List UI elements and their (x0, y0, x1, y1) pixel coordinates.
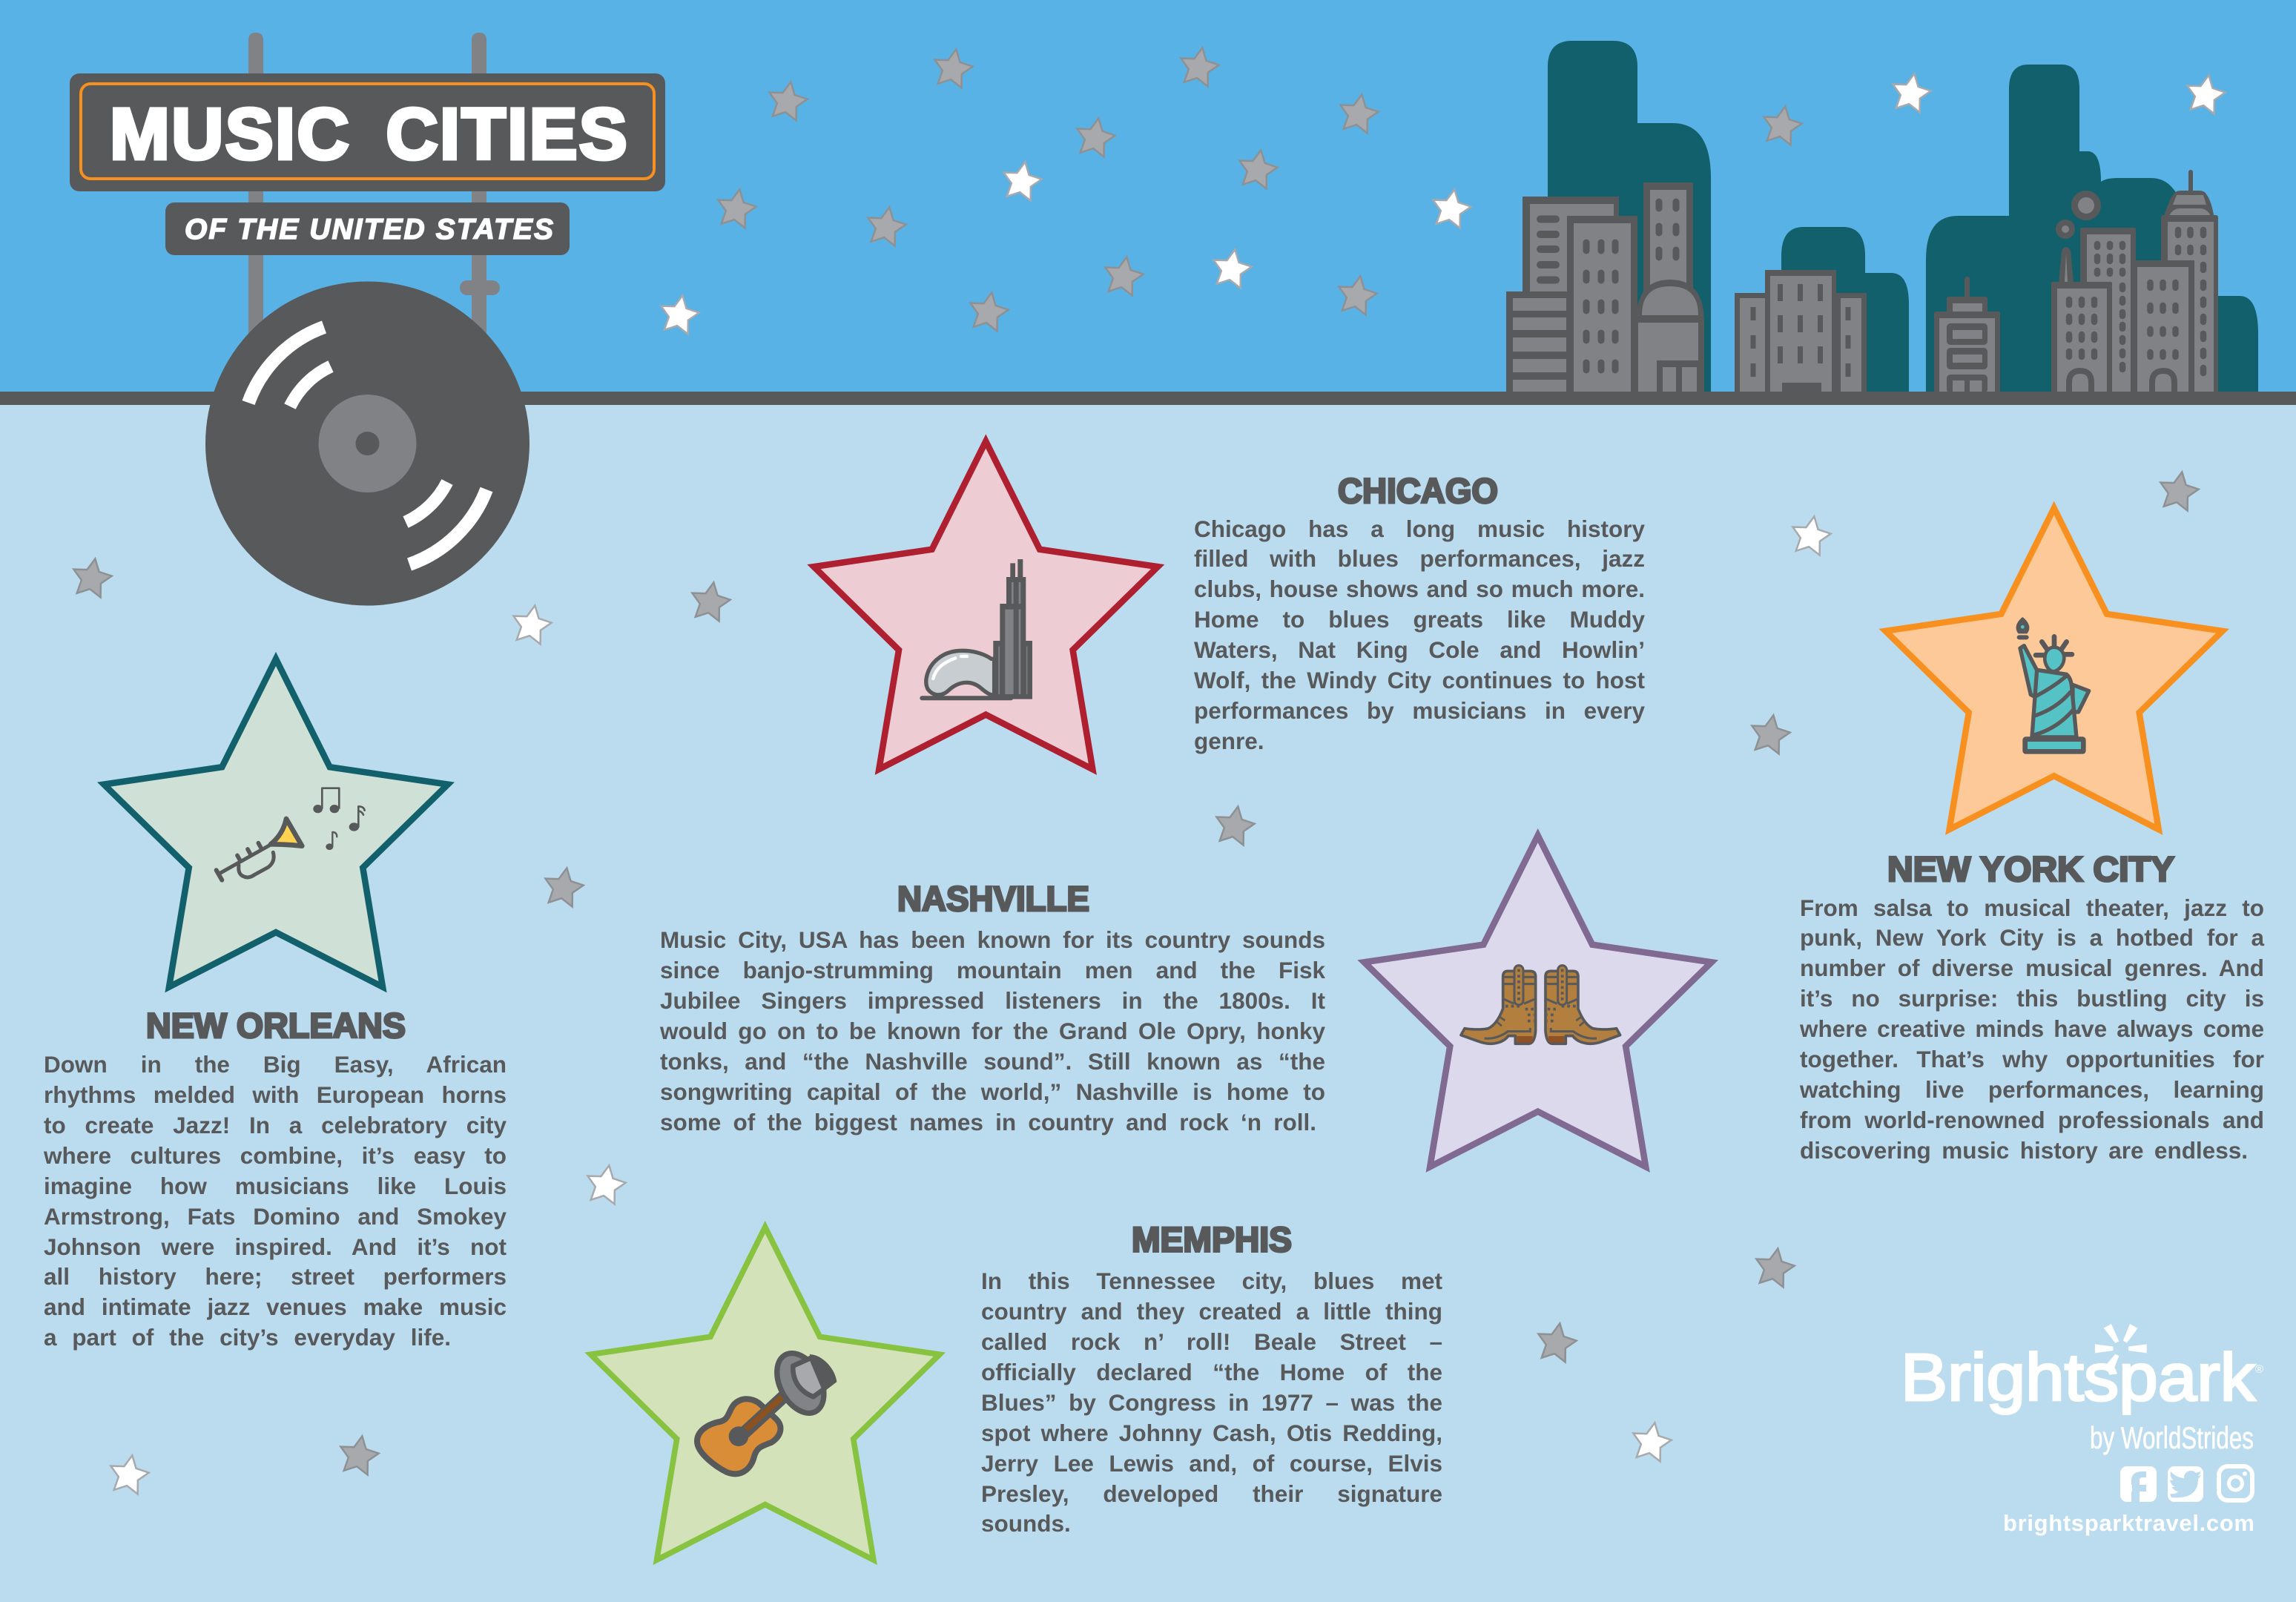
stars on the lower background (70, 469, 2201, 1495)
horizon bar (0, 392, 2296, 405)
logo spark rays (2095, 1324, 2147, 1374)
website: brightsparktravel.com (2003, 1510, 2254, 1536)
text: New York City: together. That’s why opportunities for (1800, 1046, 2264, 1072)
star: New Orleans (104, 659, 448, 987)
text: Memphis (981, 1268, 1442, 1537)
text: Chicago: Chicago has a long music history (1194, 515, 1645, 542)
icon: Chicago bean and Willis Tower (922, 559, 1032, 699)
text: Chicago: genre. (1194, 728, 1264, 754)
subtitle plate (165, 202, 570, 255)
text: New York City (1799, 894, 2265, 1164)
icon: Facebook (2120, 1466, 2157, 1502)
icon: guitar and hat (697, 1345, 837, 1474)
text: New Orleans: rhythms melded with European horns (44, 1081, 507, 1108)
text: New Orleans: all history here; street performers (44, 1263, 507, 1290)
text: Memphis: Jerry Lee Lewis and, of course, Elvis (981, 1450, 1442, 1477)
text: Memphis: spot where Johnny Cash, Otis Redding, (981, 1420, 1442, 1446)
text: New Orleans: Down in the Big Easy, African (44, 1051, 507, 1078)
text: New Orleans: where cultures combine, it’s easy to (44, 1142, 507, 1169)
star: Nashville (1365, 835, 1712, 1167)
text: Memphis: Blues” by Congress in 1977 – was the (981, 1389, 1442, 1416)
text: New York City: it’s no surprise: this bustling city is (1800, 985, 2264, 1012)
icon: Statue of Liberty (2017, 619, 2089, 751)
text: New Orleans (43, 1051, 507, 1351)
text: New York City: number of diverse musical genres. And (1800, 955, 2264, 981)
icon: Twitter (2168, 1466, 2203, 1502)
title sign (70, 73, 665, 191)
teal skyline silhouette (1548, 41, 2258, 393)
text: Memphis: Presley, developed their signature (981, 1480, 1442, 1507)
heading: New York City: NEW YORK CITY (1887, 849, 2174, 889)
sign posts (248, 33, 500, 356)
text: New Orleans: a part of the city’s everyday life. (44, 1324, 451, 1351)
text: New Orleans: Armstrong, Fats Domino and Smokey (44, 1203, 507, 1230)
icon: Instagram (2219, 1466, 2252, 1500)
icon: cowboy boots (1461, 966, 1620, 1044)
text: Chicago: clubs, house shows and so much more. (1194, 576, 1645, 602)
star: New York City (1885, 508, 2223, 829)
text: New York City: discovering music history are endless. (1800, 1137, 2248, 1164)
heading: Nashville: NASHVILLE (897, 879, 1089, 918)
text: Nashville: would go on to be known for the Grand Ole Opry, honky (660, 1018, 1325, 1044)
left building cluster (1506, 182, 1704, 393)
text: New Orleans: to create Jazz! In a celebratory city (44, 1112, 507, 1138)
text: New Orleans: and intimate jazz venues make music (44, 1293, 507, 1320)
text: Memphis: officially declared “the Home of the (981, 1359, 1442, 1385)
stars in the sky (657, 44, 2228, 335)
text: Nashville: some of the biggest names in country and rock ‘n roll. (660, 1109, 1316, 1135)
text: New York City: watching live performances, learning (1800, 1076, 2264, 1103)
text: New York City: punk, New York City is a hotbed for a (1800, 924, 2264, 951)
right building cluster (2051, 170, 2218, 393)
middle building cluster (1735, 270, 1867, 393)
heading: Chicago: CHICAGO (1338, 471, 1498, 510)
heading: Memphis: MEMPHIS (1132, 1219, 1292, 1259)
text: Chicago: Waters, Nat King Cole and Howlin’ (1194, 636, 1645, 663)
text: Chicago: Home to blues greats like Muddy (1194, 606, 1645, 633)
text: New York City: where creative minds have always come (1800, 1015, 2264, 1042)
text: Nashville (660, 926, 1325, 1135)
text: Memphis: In this Tennessee city, blues met (981, 1268, 1442, 1294)
heading: New Orleans: NEW ORLEANS (146, 1006, 406, 1045)
logo registered mark: ® (2255, 1363, 2263, 1376)
text: Memphis: called rock n’ roll! Beale Street – (981, 1328, 1442, 1355)
text: Memphis: sounds. (981, 1510, 1071, 1537)
subtitle: OF THE UNITED STATES (185, 214, 553, 245)
text: New York City: from world-renowned professionals and (1800, 1107, 2264, 1133)
text: Memphis: country and they created a little thing (981, 1298, 1442, 1325)
text: New York City: From salsa to musical theater, jazz to (1800, 894, 2264, 921)
text: Chicago: performances by musicians in every (1194, 697, 1645, 724)
star: Memphis (590, 1227, 940, 1560)
star: Chicago (814, 441, 1158, 769)
text: New Orleans: imagine how musicians like Louis (44, 1173, 507, 1199)
icon: trumpet and music notes (217, 788, 365, 880)
text: Nashville: Jubilee Singers impressed listeners in the 1800s. It (660, 987, 1325, 1014)
sky background (0, 0, 2296, 393)
text: Nashville: Music City, USA has been known for its country sounds (660, 926, 1325, 953)
vinyl record (205, 282, 530, 605)
text: Chicago: Wolf, the Windy City continues to host (1194, 667, 1645, 693)
text: Nashville: tonks, and “the Nashville sound”. Still known as “the (660, 1048, 1325, 1075)
text: Chicago: filled with blues performances, jazz (1194, 545, 1645, 572)
text: New Orleans: Johnson were inspired. And it’s not (44, 1233, 507, 1260)
text: Chicago (1194, 515, 1645, 754)
text: Nashville: since banjo-strumming mountain men and the Fisk (660, 957, 1325, 983)
small tower building (1934, 277, 2000, 393)
logo: Brightspark (1901, 1324, 2263, 1536)
title: MUSIC CITIES (110, 93, 629, 174)
logo wordmark: Brightspark (1901, 1341, 2256, 1415)
text: Nashville: songwriting capital of the world,” Nashville is home to (660, 1078, 1325, 1105)
